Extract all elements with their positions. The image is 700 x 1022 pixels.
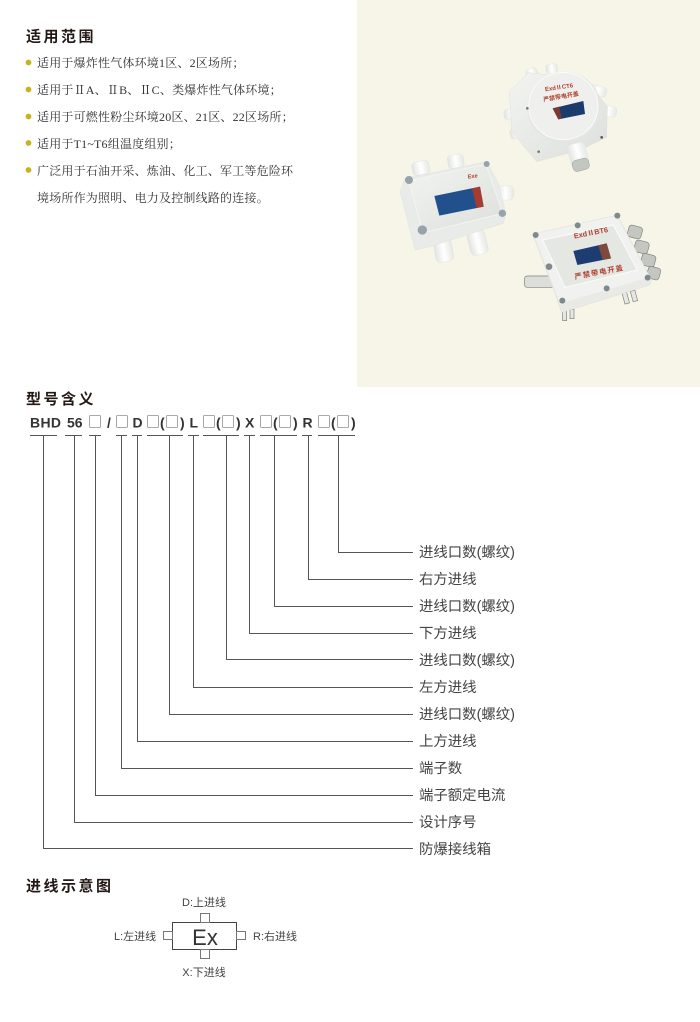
model code: D — [132, 414, 143, 430]
model code: ( — [160, 414, 165, 430]
model code labels: 设计序号 — [419, 814, 477, 831]
heading: model meaning: 型号含义 — [26, 390, 96, 408]
inlet labels: L:左进线 — [114, 929, 156, 943]
inlet labels: R:右进线 — [253, 929, 297, 943]
model code: ( — [273, 414, 278, 430]
model code: □ — [165, 412, 179, 432]
model code: ( — [216, 414, 221, 430]
product: round lid junction box: ExdⅡCT6 — [545, 82, 574, 93]
model code: ) — [351, 414, 356, 430]
model code labels: 防爆接线箱 — [419, 841, 491, 858]
model code: □ — [278, 412, 292, 432]
model code: ) — [180, 414, 185, 430]
model code labels: 右方进线 — [419, 571, 477, 588]
bullet 4: 适用于T1~T6组温度组别； — [37, 136, 181, 151]
model code labels: 进线口数(螺纹) — [419, 706, 515, 723]
model code labels: 上方进线 — [419, 733, 477, 750]
bullet 5: 境场所作为照明、电力及控制线路的连接。 — [37, 190, 269, 205]
model code: □ — [115, 412, 129, 432]
model code labels: 端子数 — [419, 760, 462, 777]
heading: inlet diagram: 进线示意图 — [26, 877, 114, 895]
heading: scope of application: 适用范围 — [26, 28, 96, 46]
product: rectangular Exe junction box — [400, 154, 514, 263]
product: round lid junction box — [503, 64, 617, 172]
model code: □ — [336, 412, 350, 432]
inlet stubs — [164, 914, 246, 958]
model code labels: 进线口数(螺纹) — [419, 598, 515, 615]
model code: □ — [317, 412, 331, 432]
inlet labels — [114, 895, 297, 979]
product: square junction box with bevelled lid: 严禁带电开盖 — [574, 263, 625, 281]
model code labels: 进线口数(螺纹) — [419, 544, 515, 561]
model code: L — [190, 414, 198, 430]
model code: ( — [331, 414, 336, 430]
model code: 56 — [67, 414, 83, 430]
model code — [30, 412, 356, 432]
bullet 2: 适用于ⅡA、ⅡB、ⅡC、类爆炸性气体环境； — [37, 82, 282, 97]
model code: □ — [202, 412, 216, 432]
model code labels — [419, 544, 515, 858]
product: square junction box with bevelled lid — [524, 213, 661, 321]
model code: □ — [259, 412, 273, 432]
model code labels: 进线口数(螺纹) — [419, 652, 515, 669]
product: rectangular Exe junction box: Exe — [467, 173, 478, 181]
inlet labels: D:上进线 — [182, 895, 226, 909]
Ex box — [172, 922, 236, 950]
model code: □ — [88, 412, 102, 432]
product: square junction box with bevelled lid: ExdⅡBT6 — [573, 225, 609, 241]
model code labels: 端子额定电流 — [419, 787, 505, 804]
bullet 1: 适用于爆炸性气体环境1区、2区场所； — [37, 55, 245, 70]
model code: BHD — [30, 414, 61, 430]
bullet 5 — [26, 163, 294, 205]
bullet 5: 广泛用于石油开采、炼油、化工、军工等危险环 — [37, 163, 294, 178]
bullet 3: 适用于可燃性粉尘环境20区、21区、22区场所； — [37, 109, 294, 124]
model code: □ — [146, 412, 160, 432]
illustration: three junction boxes — [400, 64, 661, 321]
model code labels: 左方进线 — [419, 679, 477, 696]
model code: ) — [236, 414, 241, 430]
inlet diagram — [114, 895, 297, 979]
product: round lid junction box: 严禁带电开盖 — [543, 90, 579, 104]
panel: product photos background — [357, 0, 700, 387]
inlet labels: X:下进线 — [182, 965, 226, 979]
Ex box: Ex — [192, 925, 218, 950]
model code: R — [302, 414, 313, 430]
model code: ) — [293, 414, 298, 430]
model code: / — [107, 414, 111, 430]
list: application bullets — [26, 55, 294, 205]
model code: □ — [221, 412, 235, 432]
model code leader lines — [30, 436, 413, 848]
model code labels: 下方进线 — [419, 625, 477, 642]
model code: X — [245, 414, 255, 430]
